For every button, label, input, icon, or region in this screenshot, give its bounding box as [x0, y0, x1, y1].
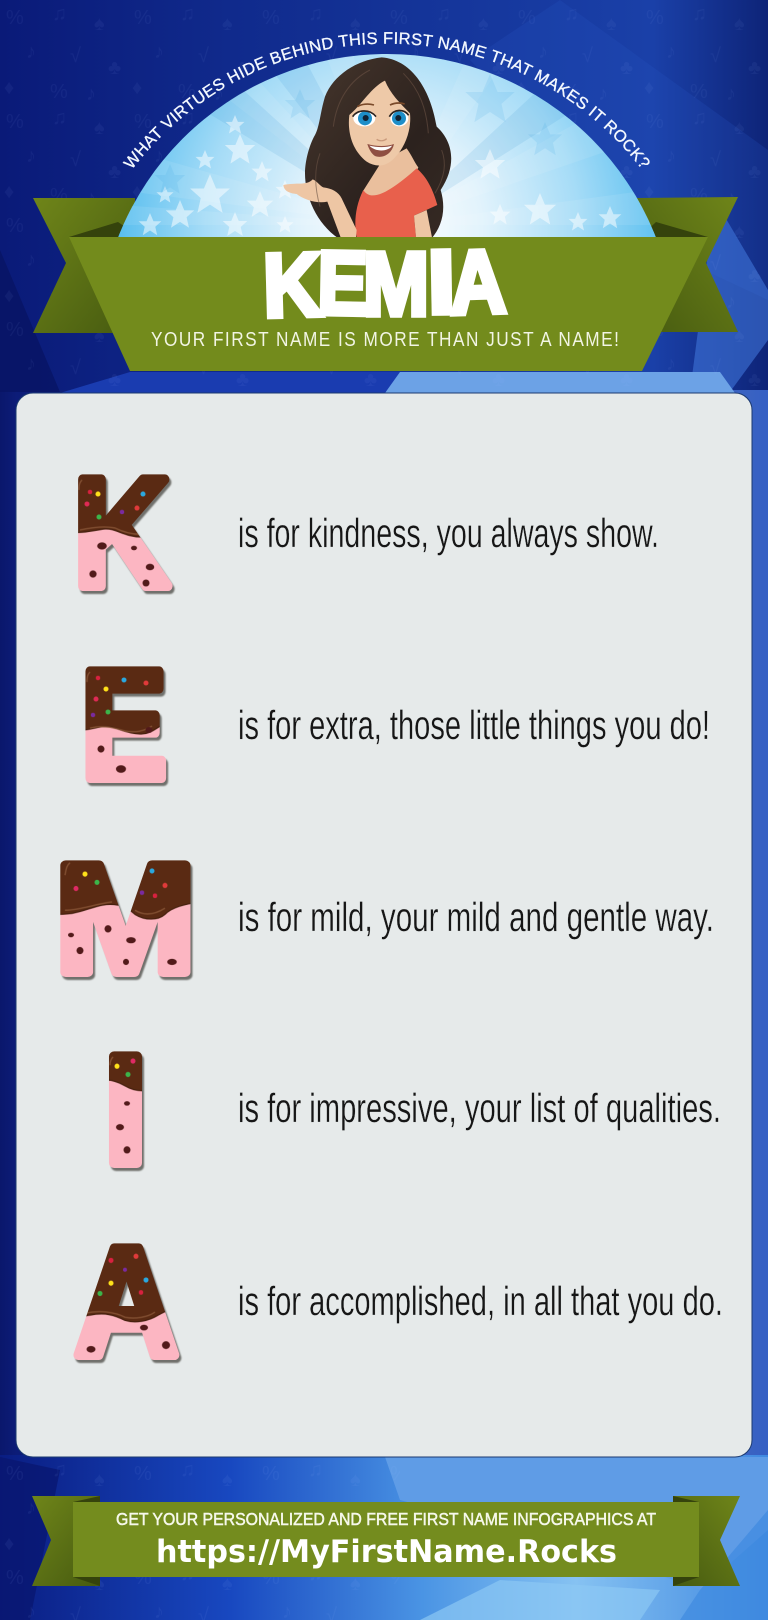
- hand and forearm: [283, 179, 357, 237]
- row M: [54, 832, 714, 1005]
- name title: M: [363, 235, 429, 335]
- name title: E: [317, 234, 368, 334]
- dome with star burst: [118, 54, 656, 237]
- hair: [305, 57, 451, 238]
- letter A: A: [74, 1215, 178, 1388]
- right arm: [414, 210, 432, 237]
- name title: A: [448, 232, 508, 334]
- footer tails: [32, 1496, 740, 1586]
- row E: [81, 638, 710, 811]
- name title: [262, 232, 508, 337]
- letter K: K: [74, 446, 170, 619]
- row A: [74, 1215, 723, 1388]
- footer ribbon: [32, 1496, 740, 1586]
- neck and chest: [363, 148, 418, 199]
- letter E: E: [81, 638, 167, 811]
- panel: acrostic card: [16, 393, 752, 1457]
- letter M: M: [54, 832, 196, 1005]
- hair strands: [316, 70, 444, 207]
- main green ribbon: [69, 237, 708, 371]
- mouth: [367, 144, 394, 157]
- character: woman presenting: [283, 57, 451, 238]
- row K: [74, 446, 659, 619]
- ribbon back tails: [33, 197, 738, 333]
- name title: K: [262, 235, 323, 337]
- name title: I: [427, 233, 456, 333]
- eyes: [353, 103, 409, 126]
- footer url: https://MyFirstName.Rocks: [156, 1534, 617, 1570]
- footer band: [73, 1502, 699, 1577]
- footer call to action: GET YOUR PERSONALIZED AND FREE FIRST NAME INFOGRAPHICS AT: [116, 1509, 656, 1529]
- shirt: [355, 168, 437, 237]
- arched heading text: WHAT VIRTUES HIDE BEHIND THIS FIRST NAME THAT MAKES IT ROCK?: [122, 32, 650, 168]
- letter I: I: [104, 1023, 148, 1196]
- nose: [377, 139, 387, 141]
- face: [349, 81, 410, 166]
- row I: [104, 1023, 721, 1196]
- tagline: YOUR FIRST NAME IS MORE THAN JUST A NAME!: [151, 329, 619, 351]
